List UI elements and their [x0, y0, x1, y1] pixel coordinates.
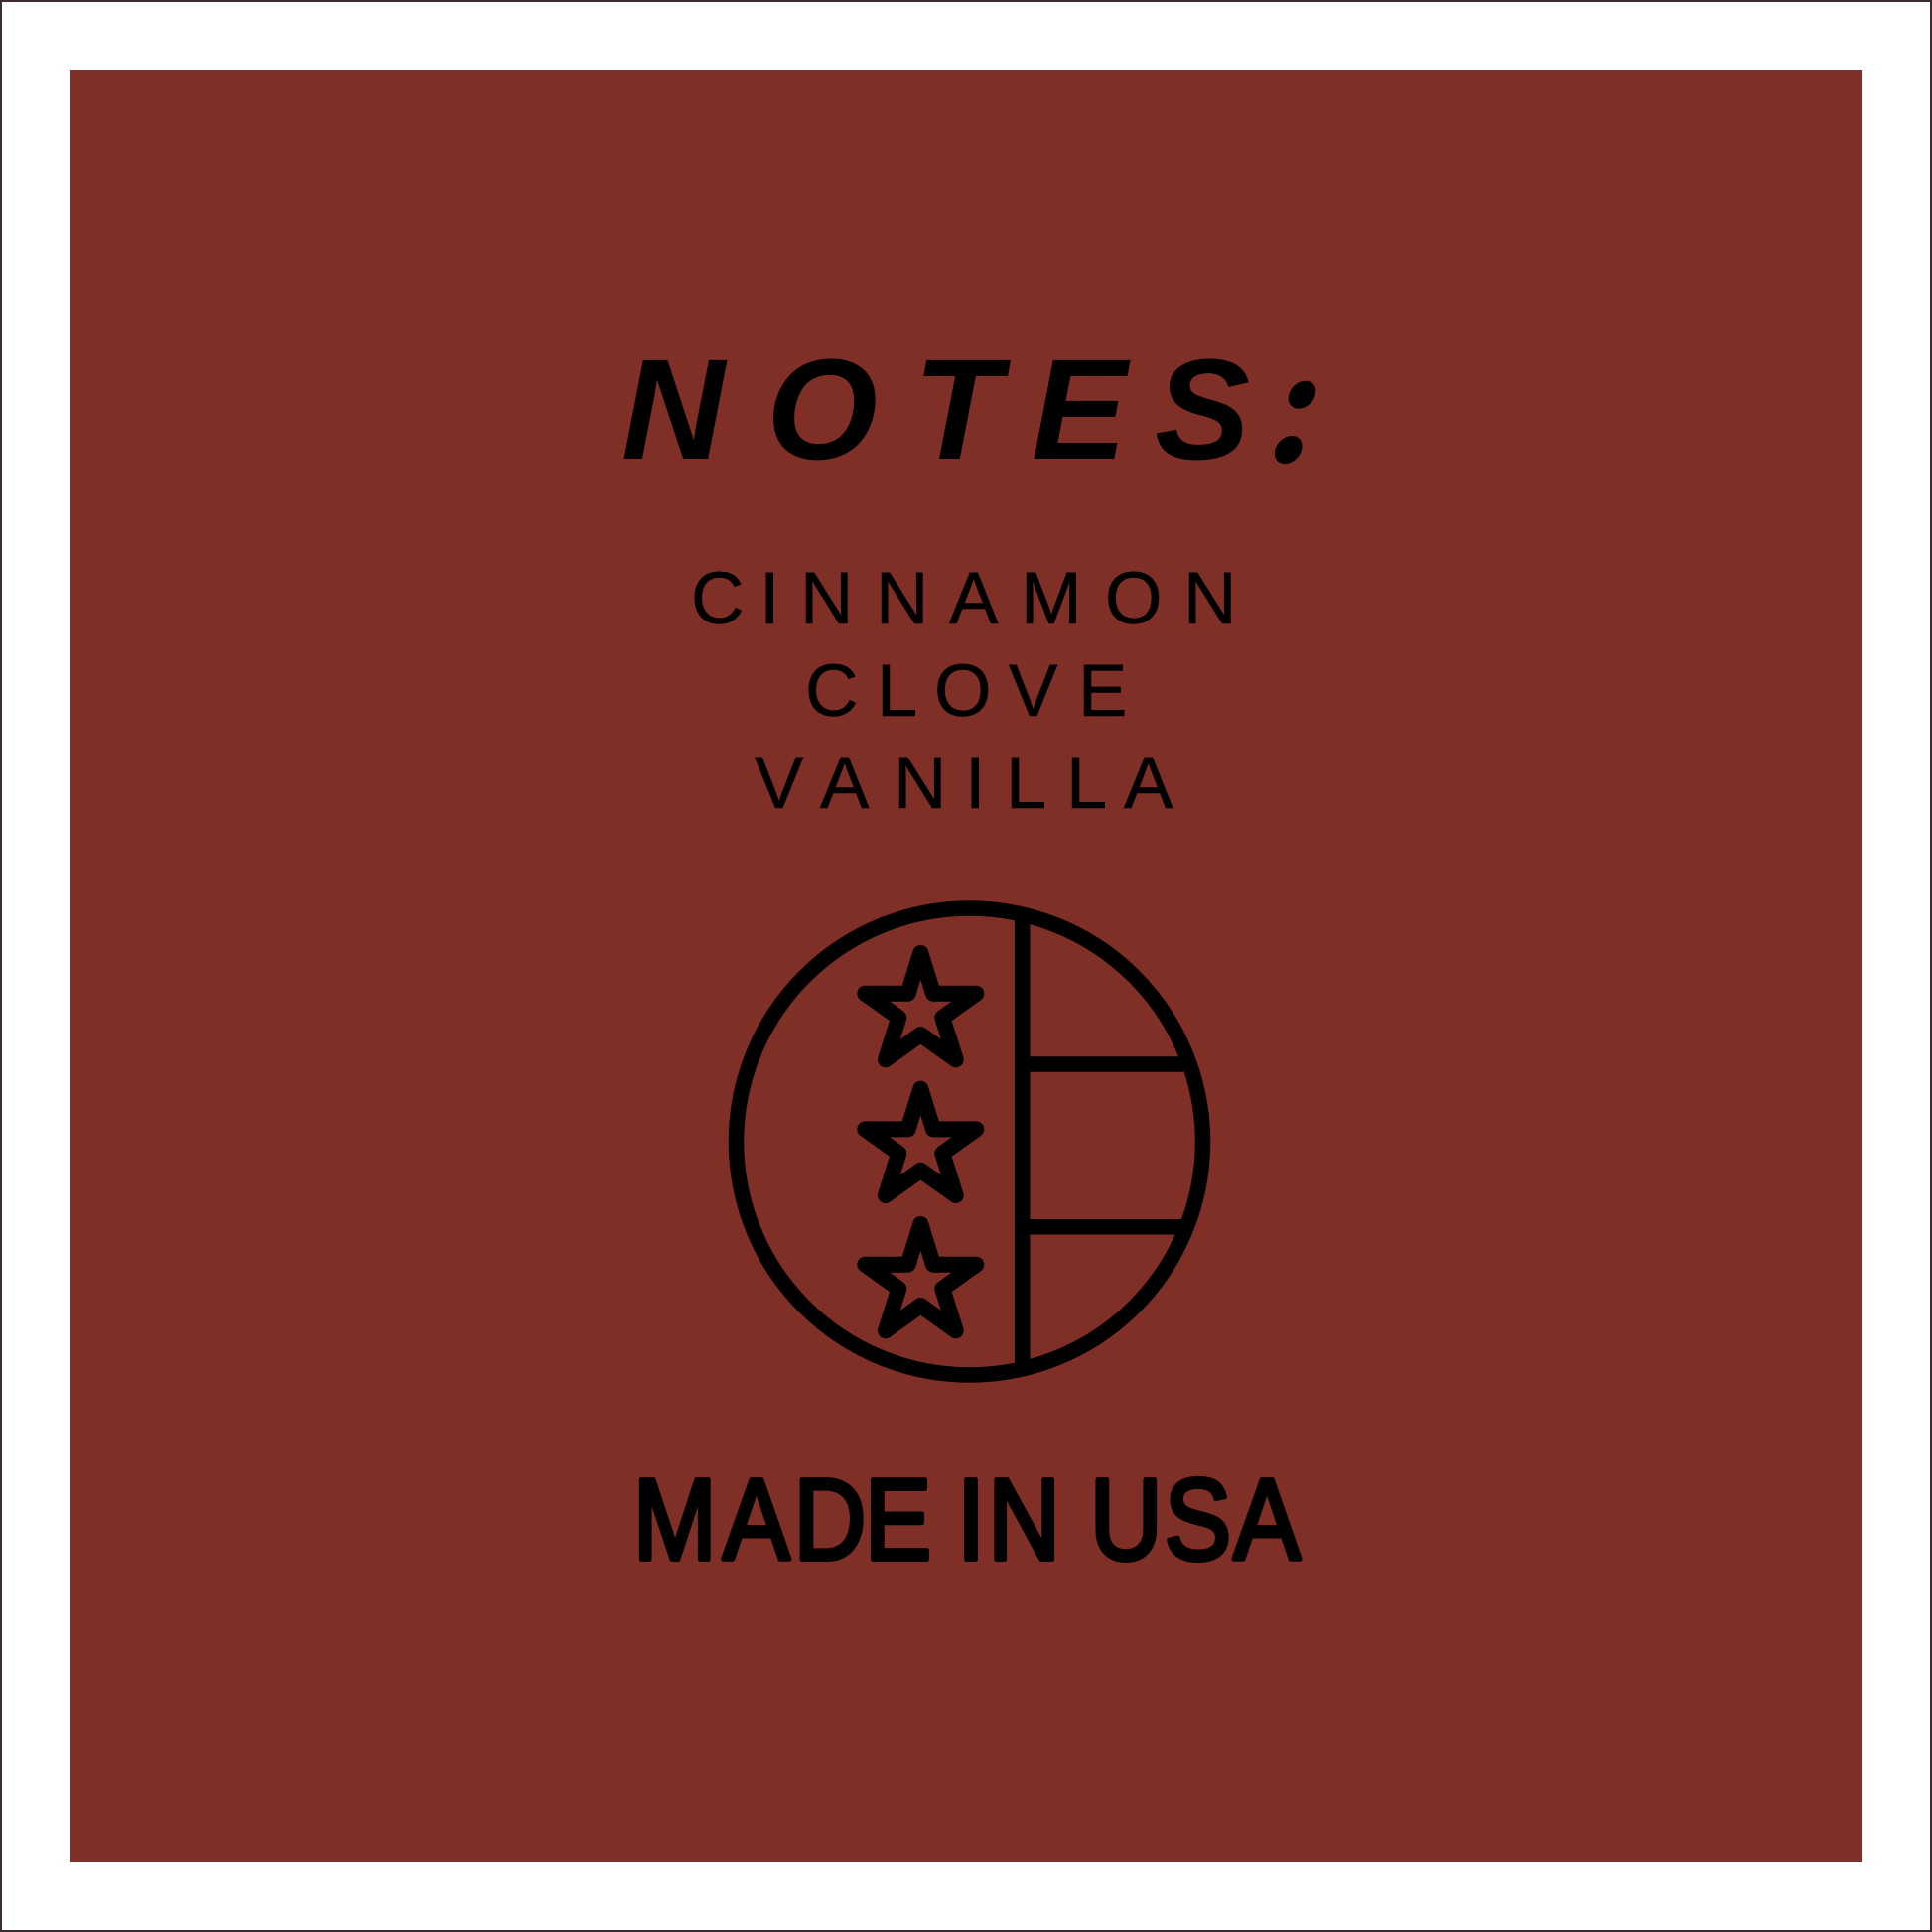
note: clove: CLOVE: [805, 649, 1127, 732]
text block: scent notes: [691, 557, 1236, 824]
flag upper stripe: [1023, 1056, 1183, 1072]
icon: american flag badge: [737, 908, 1203, 1375]
flag pole divider: [1015, 913, 1030, 1370]
note: vanilla: VANILLA: [755, 742, 1173, 824]
badge circle: [737, 908, 1203, 1375]
title: notes: NOTES: [621, 330, 1250, 489]
title: notes: [621, 295, 1317, 504]
text: made in usa: MADE IN USA: [633, 1456, 1301, 1585]
star 1: [865, 953, 976, 1059]
note: cinnamon: CINNAMON: [691, 557, 1236, 639]
title: notes: :: [1262, 295, 1317, 504]
star 3: [865, 1224, 976, 1330]
flag lower stripe: [1023, 1219, 1183, 1234]
star 2: [865, 1089, 976, 1195]
stars column: [865, 953, 976, 1330]
